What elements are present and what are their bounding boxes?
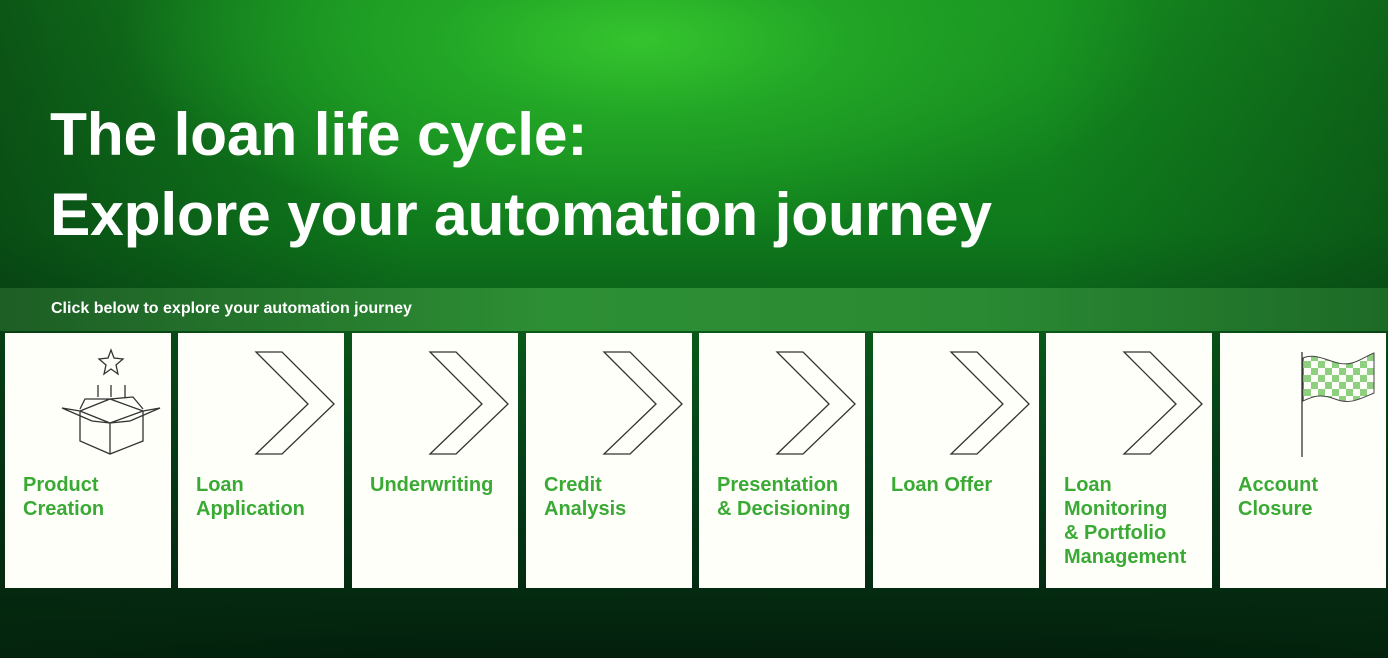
subtitle band: Click below to explore your automation journey bbox=[51, 300, 412, 317]
icon: chevron bbox=[428, 351, 509, 455]
icon: chevron bbox=[950, 351, 1030, 455]
card: account closure bbox=[1220, 333, 1386, 588]
card: credit analysis: Credit bbox=[544, 474, 602, 496]
card: loan offer bbox=[873, 333, 1039, 588]
card: loan monitoring: & Portfolio bbox=[1064, 522, 1166, 544]
icon: chevron bbox=[602, 351, 683, 455]
card: account closure: Account bbox=[1238, 474, 1318, 496]
title: The loan life cycle: bbox=[50, 100, 587, 168]
card: product creation bbox=[5, 333, 171, 588]
icon: chevron bbox=[1122, 351, 1203, 455]
card: loan monitoring: Loan bbox=[1064, 474, 1112, 496]
icon: checkered flag bbox=[1301, 352, 1374, 457]
title bbox=[50, 100, 992, 248]
card: product creation: Product bbox=[23, 474, 99, 496]
icon: box with star bbox=[62, 348, 160, 455]
subtitle band bbox=[0, 288, 1388, 331]
card: underwriting: Underwriting bbox=[370, 474, 493, 496]
card: loan monitoring: Management bbox=[1064, 546, 1186, 568]
card: presentation: Presentation bbox=[717, 474, 838, 496]
card: loan application bbox=[178, 333, 344, 588]
card: loan monitoring: Monitoring bbox=[1064, 498, 1167, 520]
card: presentation: & Decisioning bbox=[717, 498, 850, 520]
card: loan offer: Loan Offer bbox=[891, 474, 992, 496]
card: product creation: Creation bbox=[23, 498, 104, 520]
card: credit analysis: Analysis bbox=[544, 498, 626, 520]
card: account closure: Closure bbox=[1238, 498, 1312, 520]
card: loan monitoring bbox=[1046, 333, 1212, 588]
card: credit analysis bbox=[526, 333, 692, 588]
icon: chevron bbox=[254, 351, 335, 455]
title: Explore your automation journey bbox=[50, 180, 992, 248]
card: presentation bbox=[699, 333, 865, 588]
card: underwriting bbox=[352, 333, 518, 588]
icon: chevron bbox=[776, 351, 856, 455]
card: loan application: Application bbox=[196, 498, 305, 520]
card: loan application: Loan bbox=[196, 474, 244, 496]
